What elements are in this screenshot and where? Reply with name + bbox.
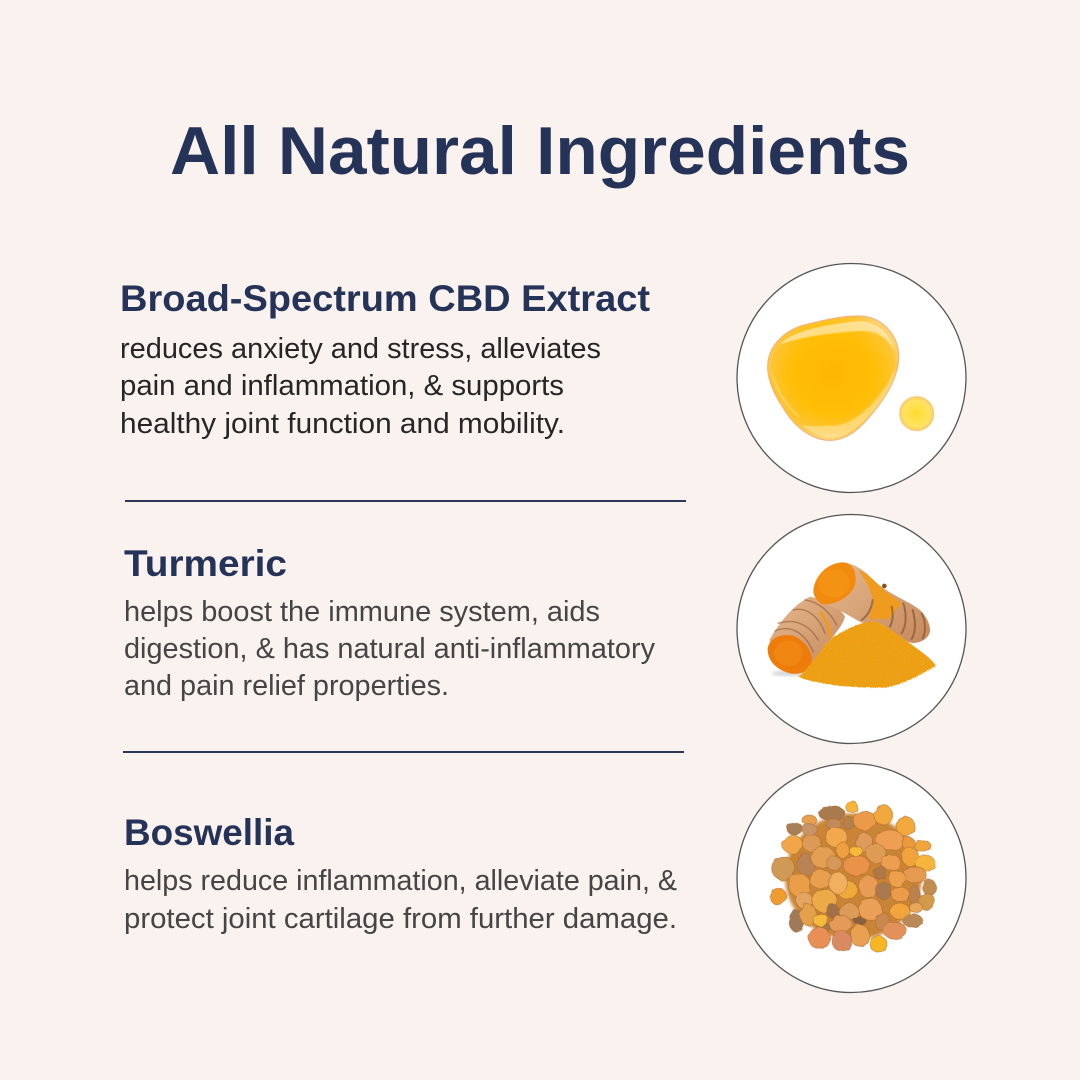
panel: Turmeric text xyxy=(124,543,655,702)
text block: Boswellia description: protect joint cartilage from further damage. xyxy=(124,903,677,935)
small oil drop xyxy=(900,397,934,431)
right root xyxy=(813,562,930,643)
panel: Boswellia text xyxy=(124,812,677,935)
icon: turmeric roots and powder in circle xyxy=(737,514,966,744)
left root xyxy=(768,597,845,674)
text block: Turmeric description: and pain relief properties. xyxy=(124,670,449,702)
powder pile xyxy=(798,621,936,688)
text block: Boswellia description: helps reduce inflammation, alleviate pain, & xyxy=(124,865,677,897)
text block: Turmeric description xyxy=(124,596,655,702)
large oil drop xyxy=(768,316,899,440)
icon: boswellia resin pieces in circle xyxy=(737,764,966,992)
text block: CBD description xyxy=(120,333,601,440)
text block: CBD description: pain and inflammation, & supports xyxy=(120,370,564,402)
text block: CBD description: reduces anxiety and stress, alleviates xyxy=(120,333,601,365)
text block: Boswellia description xyxy=(124,865,677,935)
heading: Broad-Spectrum CBD Extract: Broad-Spectrum CBD Extract xyxy=(120,278,650,319)
panel: Broad-Spectrum CBD Extract text xyxy=(120,278,650,440)
icon: CBD oil drops in circle xyxy=(737,264,966,492)
heading: Boswellia: Boswellia xyxy=(124,812,294,853)
title: All Natural Ingredients xyxy=(170,113,910,189)
text block: Turmeric description: helps boost the immune system, aids xyxy=(124,596,600,628)
heading: Turmeric: Turmeric xyxy=(124,543,287,584)
text block: CBD description: healthy joint function and mobility. xyxy=(120,408,565,440)
text block: Turmeric description: digestion, & has natural anti-inflammatory xyxy=(124,633,655,665)
